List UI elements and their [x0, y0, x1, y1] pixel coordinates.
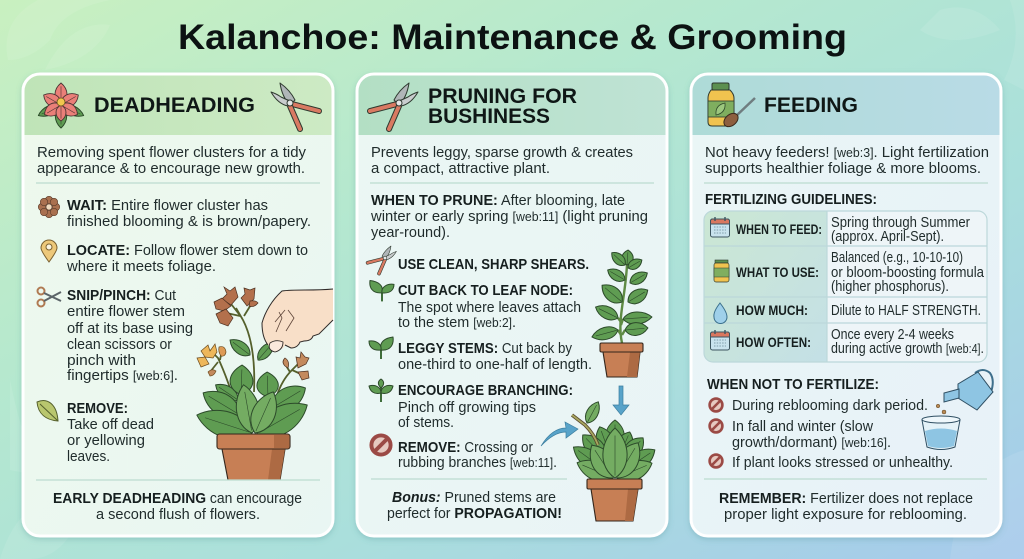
- step: locate: where it meets foliage.: [66, 258, 216, 275]
- heading: pruning for bushiness: PRUNING FOR: [428, 84, 577, 108]
- step: remove: REMOVE:: [67, 400, 128, 417]
- list: when not to fertilize: [710, 397, 953, 471]
- callout: remember: proper light exposure for reblooming.: [724, 506, 967, 523]
- intro text: a compact, attractive plant.: [371, 160, 550, 177]
- heading: deadheading: DEADHEADING: [94, 93, 255, 117]
- step: remove: leaves.: [67, 448, 110, 465]
- title: Kalanchoe: Maintenance & Grooming: [178, 18, 847, 57]
- step: remove: REMOVE: Crossing or: [398, 439, 533, 456]
- callout: early deadheading: EARLY DEADHEADING can encourage: [53, 490, 302, 507]
- subheading: fertilizing guidelines: FERTILIZING GUIDELINES:: [705, 191, 877, 208]
- heading: feeding: FEEDING: [764, 93, 858, 117]
- icon: fertilizer bottle and spoon: [708, 83, 755, 129]
- icon: no sign: [371, 435, 391, 455]
- list: when not to fertilize: growth/dormant) [web:16].: [732, 434, 891, 451]
- intro text: [37, 144, 306, 177]
- when to prune: WHEN TO PRUNE: After blooming, late: [371, 192, 625, 209]
- step: remove: Take off dead: [67, 416, 154, 433]
- icon: scissors: [38, 288, 61, 306]
- icon: pink flower: [36, 83, 86, 128]
- icon: sprout: [370, 280, 394, 301]
- table: fertilizing guidelines: [704, 211, 987, 362]
- illustration: potted kalanchoe with pinching hand: [193, 287, 333, 480]
- panel: pruning for bushiness: [357, 74, 667, 536]
- heading: pruning for bushiness: BUSHINESS: [428, 104, 550, 128]
- step: remove: [398, 439, 557, 471]
- step: leggy stems: [398, 340, 592, 373]
- step: wait: [67, 197, 311, 230]
- icon: small shears: [368, 246, 396, 274]
- arrow: curved to cut stem: [541, 422, 578, 446]
- callout: bonus: [387, 489, 562, 522]
- when to prune: winter or early spring [web:11] (light pruning: [370, 208, 648, 225]
- step: cut back to leaf node: CUT BACK TO LEAF NODE:: [398, 282, 573, 299]
- row: what to use: or bloom-boosting formula: [831, 265, 985, 281]
- arrow: down: [613, 386, 629, 415]
- step: snip or pinch: [67, 287, 193, 384]
- panel header: pruning: [358, 76, 666, 135]
- step: cut back to leaf node: to the stem [web:2].: [398, 314, 516, 331]
- step: remove: or yellowing: [67, 432, 145, 449]
- panel header: feeding: [692, 76, 1000, 135]
- intro text: [705, 144, 989, 177]
- step: encourage branching: [398, 382, 573, 431]
- illustration: watering can and glass: [922, 370, 993, 450]
- when to prune: year-round).: [371, 224, 450, 241]
- subheading: when not to fertilize: WHEN NOT TO FERTILIZE:: [707, 376, 879, 393]
- intro text: appearance & to encourage new growth.: [37, 160, 305, 177]
- callout: remember: [719, 490, 973, 523]
- icon: branching sprout: [369, 379, 393, 402]
- callout: early deadheading: a second flush of flowers.: [96, 506, 260, 523]
- step: encourage branching: Pinch off growing tips: [398, 399, 536, 416]
- step: wait: WAIT: Entire flower cluster has: [67, 197, 268, 214]
- row: how often: HOW OFTEN:: [736, 334, 811, 350]
- icon: location pin: [41, 240, 57, 262]
- row: how often: [710, 327, 984, 357]
- row: what to use: (higher phosphorus).: [831, 279, 949, 295]
- step: remove: [67, 400, 154, 465]
- list: when not to fertilize: If plant looks stressed or unhealthy.: [732, 454, 953, 471]
- when to prune: [370, 192, 648, 241]
- step: use clean shears: USE CLEAN, SHARP SHEARS.: [398, 256, 589, 273]
- step: snip or pinch: pinch with: [67, 352, 136, 369]
- panel header: deadheading: [24, 76, 332, 135]
- step: locate: LOCATE: Follow flower stem down to: [67, 242, 308, 259]
- step: cut back to leaf node: [398, 282, 581, 331]
- intro text: supports healthier foliage & more blooms.: [705, 160, 981, 177]
- step: snip or pinch: clean scissors or: [67, 336, 172, 353]
- row: how much: HOW MUCH:: [736, 302, 808, 318]
- icon: pruning shears: [271, 83, 319, 129]
- illustration: leggy plant in pot: [590, 249, 652, 377]
- step: snip or pinch: off at its base using: [67, 320, 193, 337]
- step: leggy stems: LEGGY STEMS: Cut back by: [398, 340, 572, 357]
- row: how often: Once every 2-4 weeks: [831, 327, 954, 343]
- step: snip or pinch: entire flower stem: [67, 303, 185, 320]
- icon: sprout: [369, 337, 393, 359]
- row: how often: during active growth [web:4].: [831, 341, 984, 357]
- step: wait: finished blooming & is brown/papery.: [67, 213, 311, 230]
- row: what to use: Balanced (e.g., 10-10-10): [831, 250, 963, 266]
- callout: bonus: Bonus: Pruned stems are: [392, 489, 556, 506]
- step: encourage branching: ENCOURAGE BRANCHING:: [398, 382, 573, 399]
- step: cut back to leaf node: The spot where leaves attach: [398, 299, 581, 316]
- icon: dried flower: [38, 196, 60, 218]
- icon: yellowing leaf: [37, 401, 58, 421]
- intro text: Not heavy feeders! [web:3]. Light fertilization: [705, 144, 989, 161]
- row: how much: [714, 302, 981, 324]
- list: when not to fertilize: During reblooming dark period.: [732, 397, 928, 414]
- panel: deadheading: [23, 74, 333, 536]
- row: how much: Dilute to HALF STRENGTH.: [831, 303, 981, 319]
- panel: feeding: [691, 74, 1001, 536]
- intro text: Prevents leggy, sparse growth & creates: [371, 144, 633, 161]
- step: encourage branching: of stems.: [398, 414, 454, 431]
- intro text: [371, 144, 633, 177]
- step: leggy stems: one-third to one-half of length.: [398, 356, 592, 373]
- row: what to use: [714, 250, 985, 295]
- list: when not to fertilize: In fall and winter (slow: [732, 418, 873, 435]
- step: remove: rubbing branches [web:11].: [398, 454, 557, 471]
- row: when to feed: Spring through Summer: [831, 215, 970, 231]
- callout: early deadheading: [53, 490, 302, 523]
- row: when to feed: (approx. April-Sept).: [831, 229, 944, 245]
- illustration: bushy plant in pot: [568, 399, 660, 521]
- heading: pruning for bushiness: [428, 84, 577, 128]
- step: snip or pinch: SNIP/PINCH: Cut: [67, 287, 177, 304]
- step: locate: [66, 242, 308, 275]
- row: when to feed: WHEN TO FEED:: [736, 221, 822, 237]
- row: what to use: WHAT TO USE:: [736, 264, 819, 280]
- callout: remember: REMEMBER: Fertilizer does not replace: [719, 490, 973, 507]
- row: when to feed: [710, 215, 970, 245]
- callout: bonus: perfect for PROPAGATION!: [387, 505, 562, 522]
- icon: pruning shears: [370, 83, 418, 129]
- step: snip or pinch: fingertips [web:6].: [67, 367, 178, 384]
- intro text: Removing spent flower clusters for a tidy: [37, 144, 306, 161]
